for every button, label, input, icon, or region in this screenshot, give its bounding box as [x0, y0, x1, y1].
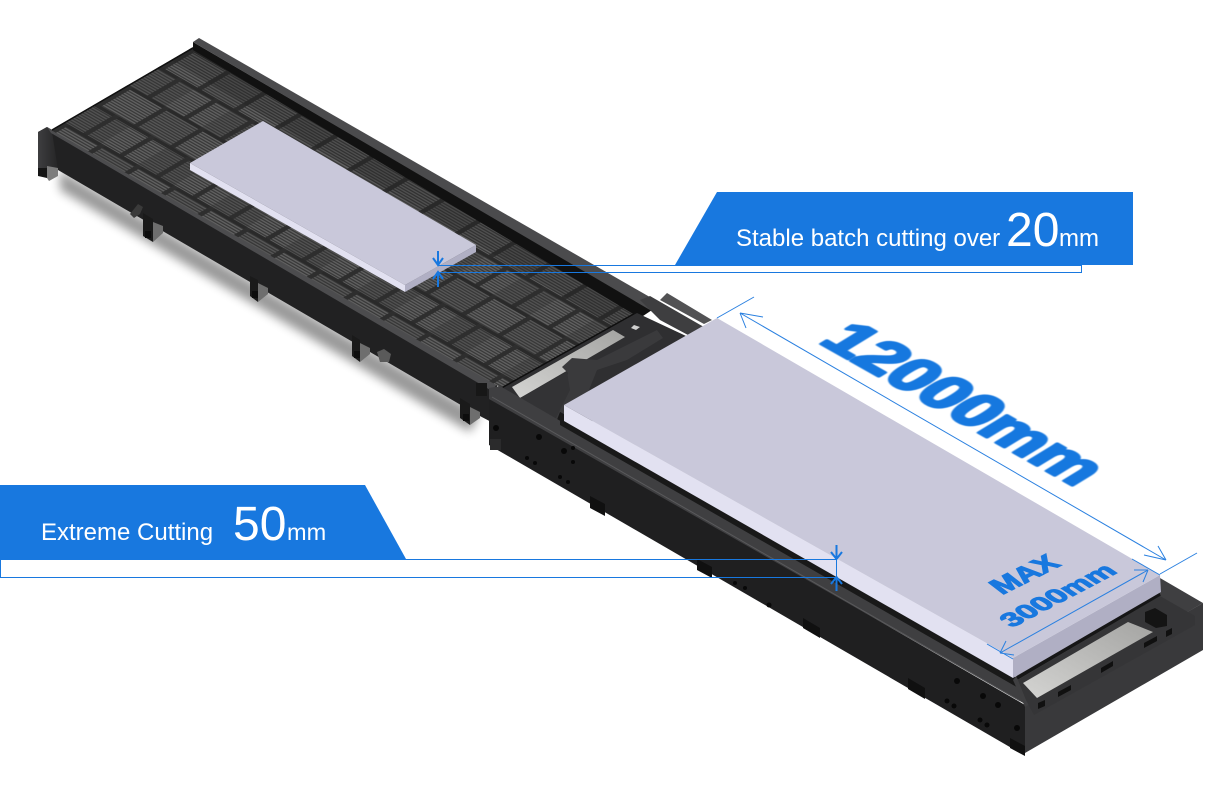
large sheet: 12000 x 3000 plate	[564, 318, 1161, 678]
support legs	[38, 166, 480, 425]
leader and thickness arrows: 50mm	[0, 545, 842, 591]
dimension label: MAX: MAX	[983, 551, 1067, 599]
callout: extreme cutting 50mm: mm	[287, 519, 326, 545]
right end frame	[1013, 578, 1203, 753]
dimension label: 3000mm: 3000mm	[993, 559, 1123, 631]
small sheet: 20mm plate	[190, 121, 476, 292]
brackets	[130, 204, 143, 218]
left section front beam	[38, 127, 497, 425]
dimension label: 12000mm: 12000mm	[806, 313, 1123, 494]
mounting holes	[493, 425, 1020, 731]
right section front beam	[489, 386, 1025, 756]
frame slots	[1038, 628, 1172, 709]
rear rail	[193, 38, 730, 350]
callout: extreme cutting 50mm	[0, 485, 406, 559]
callout: stable batch cutting over 20mm: Stable batch cutting over	[736, 225, 1000, 252]
callout: stable batch cutting over 20mm: 20	[1006, 204, 1059, 257]
callout: extreme cutting 50mm: 50	[233, 498, 286, 551]
dimension arrow: 12000mm	[717, 297, 1197, 574]
dimension arrow: 3000mm	[987, 559, 1160, 659]
leader and thickness arrows: 20mm	[433, 251, 1082, 287]
callout: stable batch cutting over 20mm: mm	[1059, 225, 1099, 252]
beam feet	[490, 439, 1025, 756]
callout: stable batch cutting over 20mm	[675, 192, 1133, 265]
gantry area between table and sheet	[476, 313, 716, 440]
machine shadow	[60, 170, 480, 432]
callout: extreme cutting 50mm: Extreme Cutting	[41, 519, 213, 546]
perforated cutting table grid	[51, 47, 637, 389]
